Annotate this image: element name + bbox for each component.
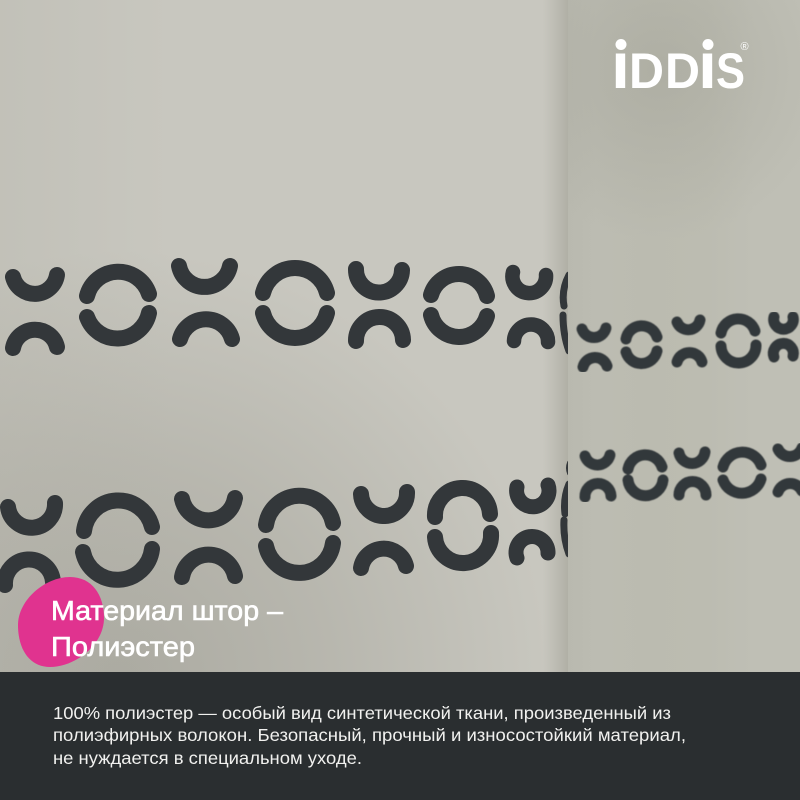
pattern: upper band on right fold [582, 317, 793, 367]
logo: iDDiS: D [665, 43, 700, 99]
text block: description: не нуждается в специальном уходе. [53, 748, 362, 768]
logo: iDDiS: ® [740, 41, 749, 53]
logo: iDDiS [612, 39, 749, 99]
title: Полиэстер [51, 631, 195, 662]
logo: iDDiS: D [629, 43, 664, 99]
pattern: upper band on left curtain [13, 266, 569, 351]
panel: right curtain fold [568, 0, 800, 672]
pattern: lower band on left curtain [5, 463, 570, 585]
text block: description: 100% полиэстер — особый вид синтетической ткани, произведенный из [53, 703, 671, 723]
panel: dark description band [0, 672, 800, 800]
logo: iDDiS: I [612, 43, 630, 99]
title: Материал штор – [51, 595, 283, 626]
title [51, 595, 283, 662]
text block: description [53, 703, 686, 768]
logo: iDDiS: S [716, 43, 745, 99]
logo: iDDiS: I [698, 43, 716, 99]
panel: left curtain fabric [0, 0, 568, 672]
icon: pink blob [18, 577, 104, 667]
pattern: lower band on right fold [585, 448, 800, 497]
text block: description: полиэфирных волокон. Безопасный, прочный и износостойкий материал, [53, 725, 686, 745]
